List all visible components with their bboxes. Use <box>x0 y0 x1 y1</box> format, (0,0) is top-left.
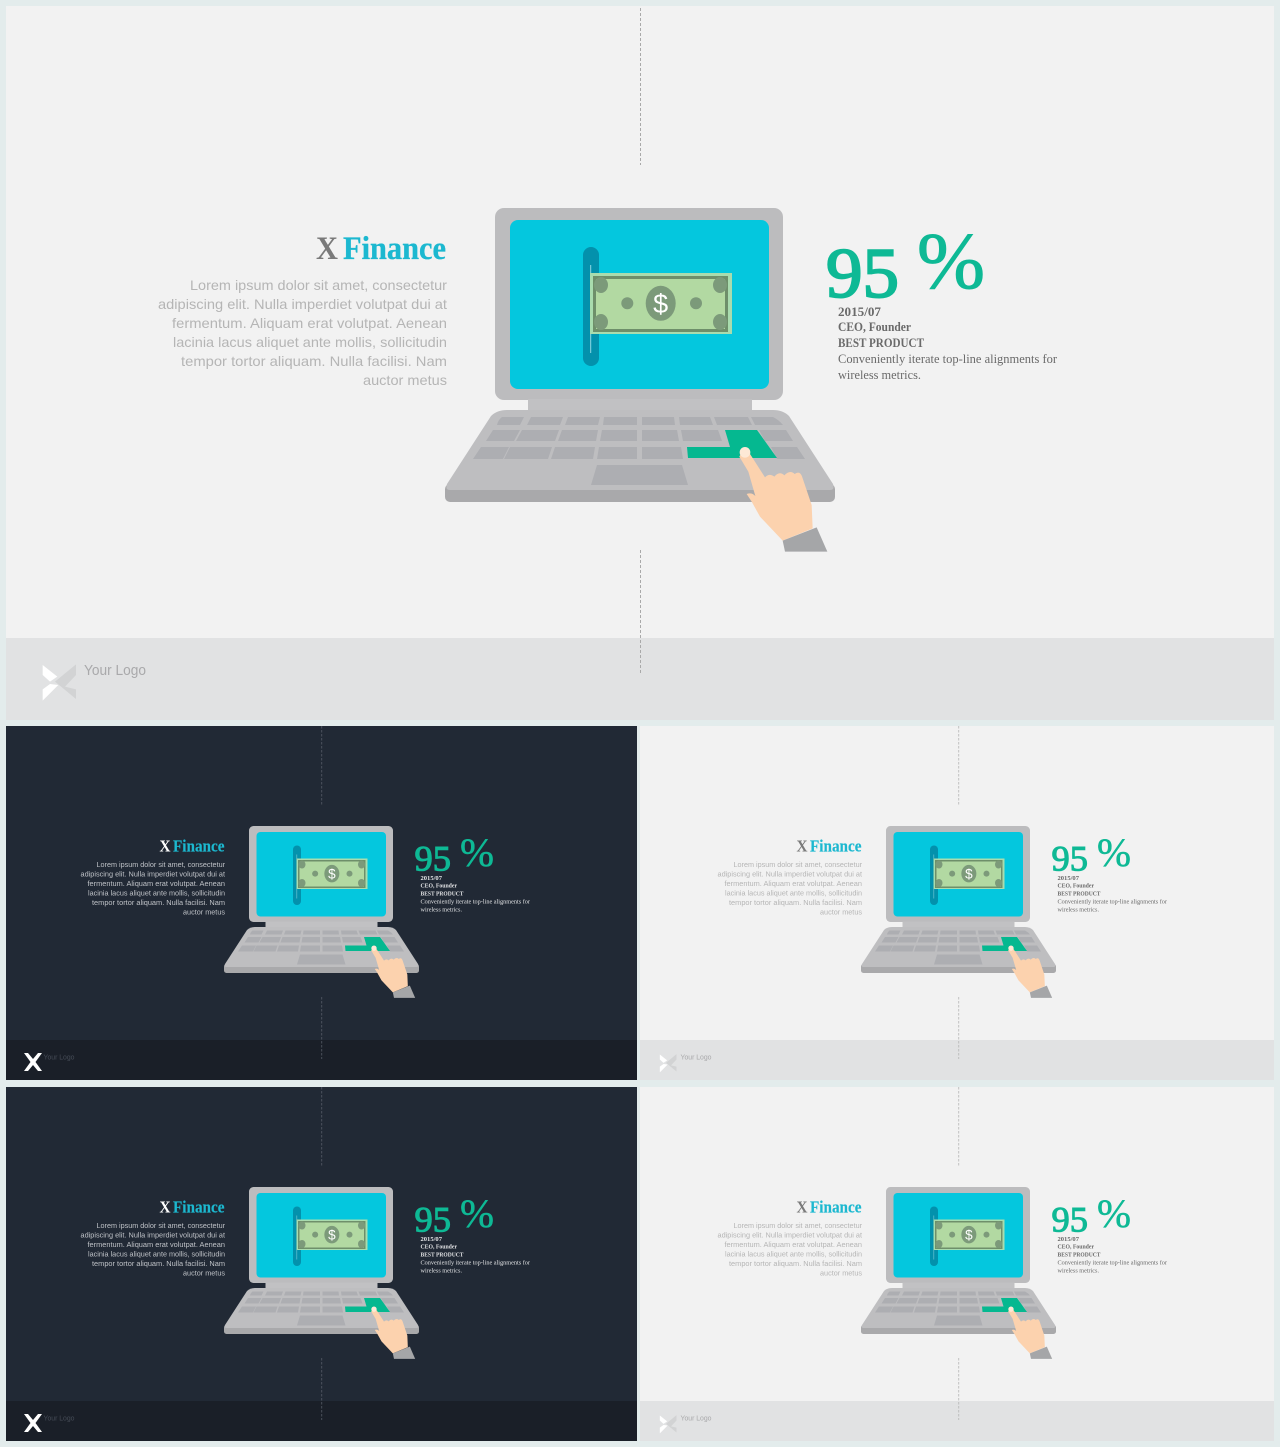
body text <box>80 1223 226 1278</box>
title: X Finance: Finance <box>810 1198 862 1216</box>
body text: lacinia lacus aliquet ante mollis, sollicitudin <box>725 890 862 898</box>
body text: fermentum. Aliquam erat volutpat. Aenean <box>724 1242 862 1249</box>
title: X Finance: Finance <box>173 1198 224 1216</box>
stat: 95 percent: % <box>460 1191 494 1236</box>
body text: tempor tortor aliquam. Nulla facilisi. Nam <box>92 1261 225 1268</box>
stat details: wireless metrics. <box>420 1268 462 1274</box>
body text: lacinia lacus aliquet ante mollis, sollicitudin <box>725 1252 862 1258</box>
stat details: BEST PRODUCT <box>838 335 924 350</box>
body text: adipiscing elit. Nulla imperdiet volutpat dui at <box>80 1232 225 1240</box>
title: X Finance: X <box>160 836 171 856</box>
stat details: 2015/07 <box>420 875 443 882</box>
body text: auctor metus <box>183 1270 226 1278</box>
body text <box>718 1223 863 1278</box>
stat details <box>1058 1236 1168 1274</box>
stat details: BEST PRODUCT <box>420 890 464 898</box>
stat details: wireless metrics. <box>1058 1268 1099 1274</box>
title: X Finance: X <box>796 836 808 856</box>
body text: tempor tortor aliquam. Nulla facilisi. Nam <box>729 900 862 907</box>
body text: fermentum. Aliquam erat volutpat. Aenean <box>88 881 225 888</box>
stat: 95 percent <box>414 830 494 878</box>
panel: large light slide <box>6 6 1274 720</box>
stat details: BEST PRODUCT <box>420 1252 464 1258</box>
stat: 95 percent: % <box>917 218 985 306</box>
stat: 95 percent: 95 <box>414 838 451 878</box>
body text: auctor metus <box>183 910 226 916</box>
title: X Finance: Finance <box>343 231 446 267</box>
logo: Your Logo <box>44 1414 74 1422</box>
body text: Lorem ipsum dolor sit amet, consectetur <box>96 862 226 869</box>
stat details: 2015/07 <box>1058 875 1080 882</box>
body text: tempor tortor aliquam. Nulla facilisi. Nam <box>181 353 447 369</box>
stat details: BEST PRODUCT <box>1058 1252 1101 1258</box>
stat details: BEST PRODUCT <box>1058 890 1101 898</box>
stat details: Conveniently iterate top-line alignments for <box>420 1260 531 1266</box>
laptop illustration: $ <box>653 289 668 319</box>
stat: 95 percent <box>826 218 985 313</box>
stat details: wireless metrics. <box>1058 906 1099 914</box>
logo <box>660 1414 712 1433</box>
body text: auctor metus <box>363 372 447 388</box>
body text: auctor metus <box>820 1270 863 1278</box>
body text <box>80 862 226 916</box>
body text: tempor tortor aliquam. Nulla facilisi. Nam <box>92 900 225 907</box>
stat details: CEO, Founder <box>420 1244 457 1250</box>
stat details: CEO, Founder <box>1058 1244 1094 1250</box>
laptop illustration: $ <box>328 1228 336 1242</box>
stat: 95 percent: 95 <box>1052 1200 1088 1240</box>
stat details <box>1058 875 1168 914</box>
body text: Lorem ipsum dolor sit amet, consectetur <box>734 1223 863 1230</box>
stat: 95 percent: 95 <box>414 1200 451 1240</box>
laptop illustration <box>224 1187 419 1359</box>
laptop illustration <box>445 208 835 552</box>
stat details: wireless metrics. <box>420 906 462 914</box>
logo: Your Logo <box>84 663 146 679</box>
title: X Finance: Finance <box>810 836 862 856</box>
stat: 95 percent <box>1052 830 1131 878</box>
stat details <box>838 304 1058 382</box>
title: X Finance: X <box>160 1198 171 1216</box>
stat: 95 percent: % <box>1097 1191 1131 1236</box>
stat details: Conveniently iterate top-line alignments for <box>1058 1260 1168 1266</box>
stat: 95 percent: % <box>460 830 494 875</box>
panel: light slide, row 2 <box>640 726 1274 1080</box>
stat details: CEO, Founder <box>420 882 457 890</box>
title: X Finance: Finance <box>173 836 224 856</box>
logo: Your Logo <box>680 1052 712 1062</box>
logo <box>660 1052 712 1072</box>
body text: adipiscing elit. Nulla imperdiet volutpat dui at <box>80 872 225 878</box>
body text: Lorem ipsum dolor sit amet, consectetur <box>190 277 447 293</box>
laptop illustration: $ <box>328 866 336 882</box>
stat details: 2015/07 <box>1058 1236 1080 1243</box>
panel: dark slide, row 3 <box>6 1087 637 1441</box>
stat details <box>420 875 531 914</box>
stat details: 2015/07 <box>420 1236 443 1243</box>
body text: tempor tortor aliquam. Nulla facilisi. Nam <box>729 1261 862 1268</box>
body text: adipiscing elit. Nulla imperdiet volutpat dui at <box>718 872 862 878</box>
title: X Finance: X <box>316 231 338 267</box>
body text: lacinia lacus aliquet ante mollis, sollicitudin <box>173 334 447 350</box>
stat details: 2015/07 <box>838 304 881 319</box>
body text: fermentum. Aliquam erat volutpat. Aenean <box>724 881 862 888</box>
stat: 95 percent: 95 <box>826 235 899 313</box>
body text: fermentum. Aliquam erat volutpat. Aenean <box>88 1242 225 1249</box>
body text <box>158 277 447 388</box>
body text <box>718 862 863 916</box>
stat details: Conveniently iterate top-line alignments for <box>420 898 531 906</box>
stat: 95 percent <box>1052 1191 1131 1240</box>
body text: fermentum. Aliquam erat volutpat. Aenean <box>172 315 447 331</box>
title: X Finance: X <box>796 1198 808 1216</box>
laptop illustration <box>861 1187 1056 1359</box>
body text: Lorem ipsum dolor sit amet, consectetur <box>96 1223 226 1230</box>
stat details <box>420 1236 531 1274</box>
logo <box>43 663 146 701</box>
body text: auctor metus <box>820 910 863 916</box>
stat details: wireless metrics. <box>838 367 921 382</box>
body text: lacinia lacus aliquet ante mollis, sollicitudin <box>88 1252 225 1258</box>
laptop illustration: $ <box>965 866 973 882</box>
laptop illustration <box>224 826 419 998</box>
logo: Your Logo <box>44 1052 74 1062</box>
stat: 95 percent: 95 <box>1052 838 1088 878</box>
panel: light slide, row 3 <box>640 1087 1274 1441</box>
body text: adipiscing elit. Nulla imperdiet volutpat dui at <box>718 1232 862 1240</box>
stat details: CEO, Founder <box>838 319 911 334</box>
laptop illustration: $ <box>965 1228 973 1242</box>
stat details: Conveniently iterate top-line alignments for <box>1058 898 1168 906</box>
panel: dark slide, row 2 <box>6 726 637 1080</box>
body text: adipiscing elit. Nulla imperdiet volutpat dui at <box>158 296 447 312</box>
body text: lacinia lacus aliquet ante mollis, sollicitudin <box>88 890 225 898</box>
body text: Lorem ipsum dolor sit amet, consectetur <box>734 862 863 869</box>
logo: Your Logo <box>680 1414 712 1422</box>
logo <box>24 1052 74 1071</box>
stat: 95 percent: % <box>1097 830 1131 875</box>
stat details: CEO, Founder <box>1058 882 1094 890</box>
stat details: Conveniently iterate top-line alignments for <box>838 351 1058 366</box>
stat: 95 percent <box>414 1191 494 1240</box>
laptop illustration <box>861 826 1056 998</box>
logo <box>24 1414 74 1432</box>
